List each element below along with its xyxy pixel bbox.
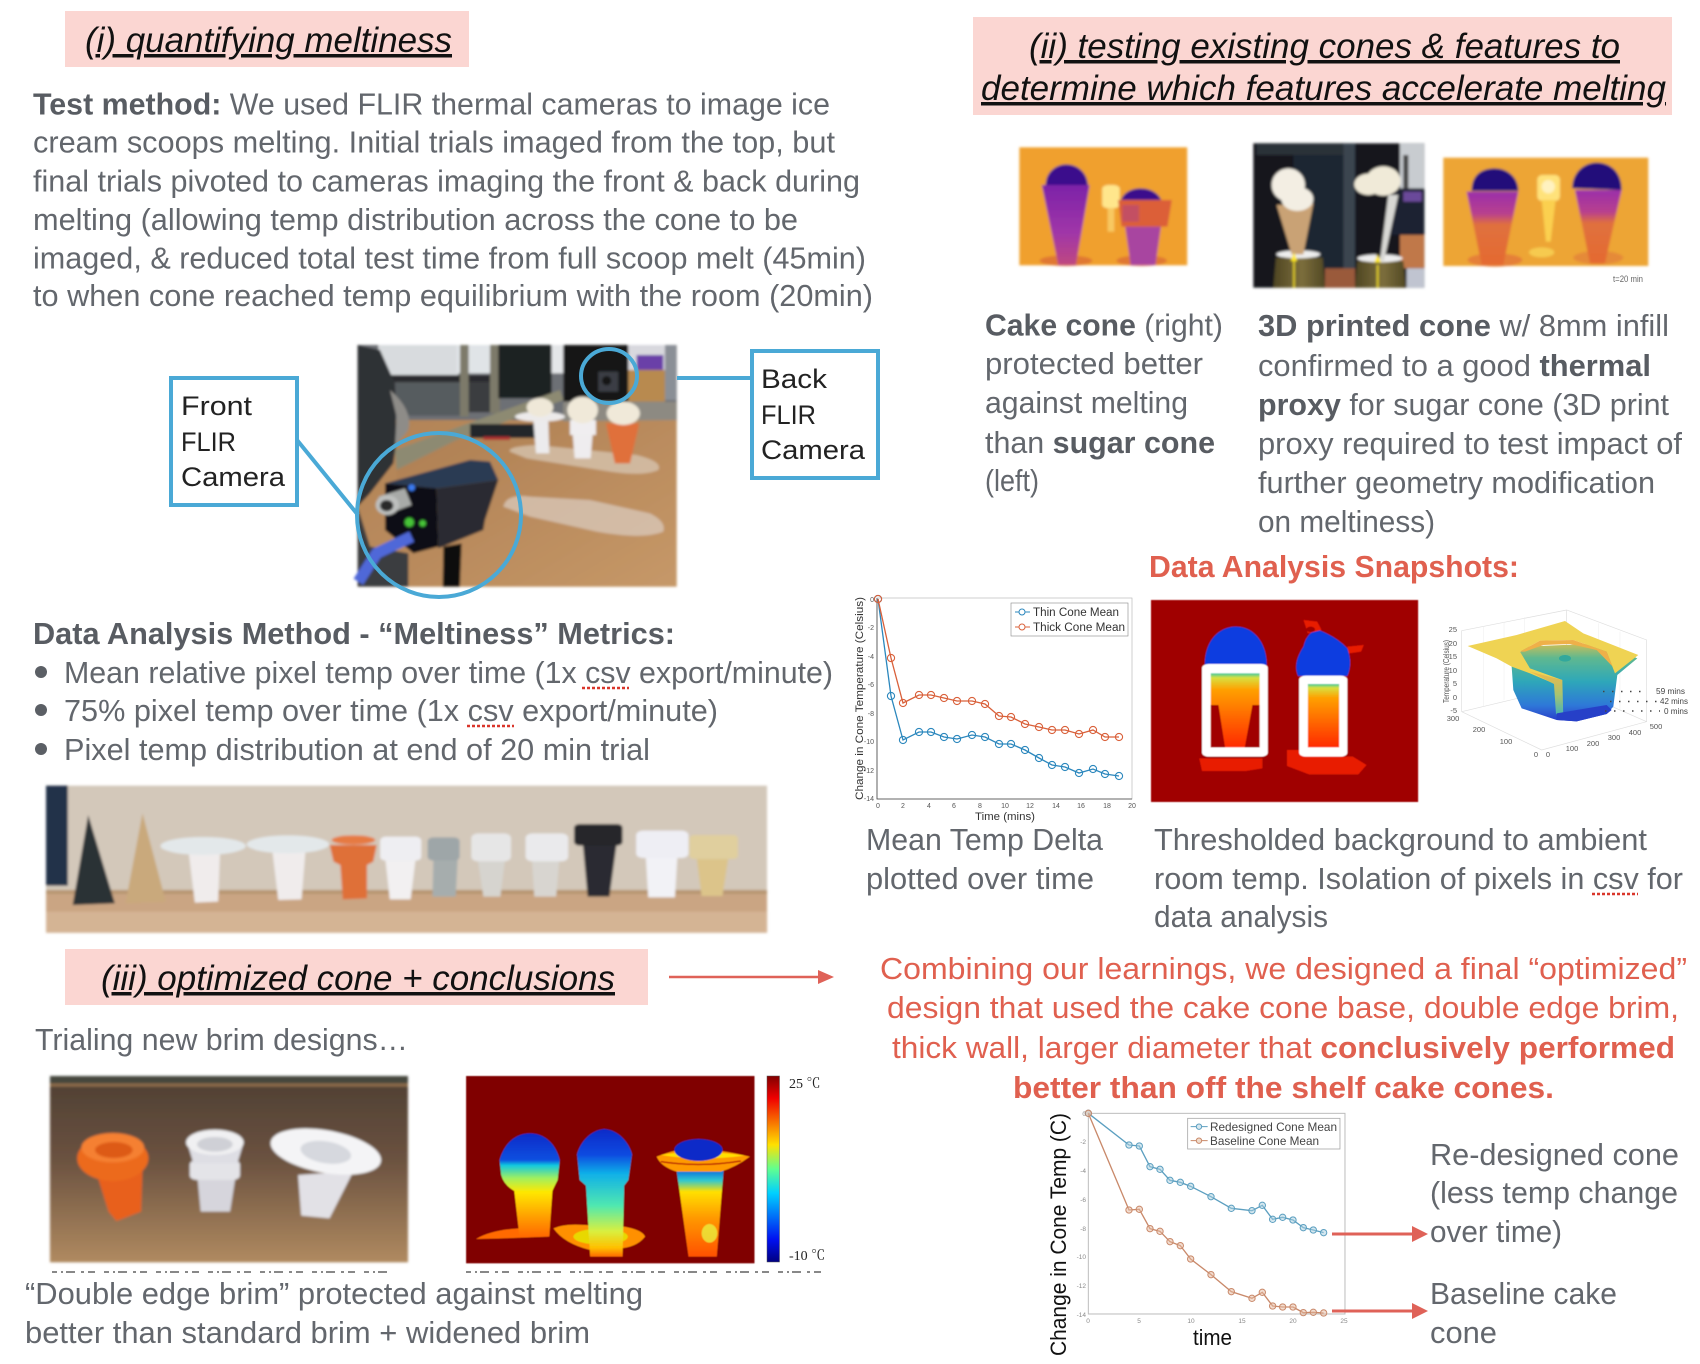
connector: back camera — [677, 376, 751, 380]
colorbar: -10 ℃ — [789, 1249, 825, 1264]
legend labels — [1210, 1120, 1337, 1148]
arrow: section iii to conclusion — [669, 970, 834, 984]
text block: test method: cream scoops melting. Initial trials imaged from the top, but — [33, 124, 835, 160]
text block: test method: to when cone reached temp equilibrium with the room (20min) — [33, 278, 873, 313]
axis title: Temperature (Celsius) — [1442, 640, 1451, 703]
label: front FLIR camera — [171, 378, 297, 505]
x ticks: 0 — [1086, 1318, 1090, 1325]
connector: front camera — [297, 440, 358, 515]
plot area — [1088, 1113, 1345, 1314]
colorbar: 25 ℃ — [789, 1077, 820, 1092]
callout: front camera circle — [357, 433, 521, 597]
axis tick labels: 400 — [1629, 728, 1641, 737]
heading: (ii) testing existing cones and features: determine which features accelerate melting — [981, 69, 1667, 108]
text: thresholded background caption — [1154, 822, 1683, 934]
y ticks: -10 — [1077, 1254, 1086, 1261]
legend: Thin Cone Mean — [1033, 607, 1119, 619]
x ticks: 10 — [1187, 1318, 1195, 1325]
y axis ticks: -2 — [868, 625, 874, 632]
axis tick labels: 10 — [1449, 666, 1457, 675]
y axis ticks: -6 — [868, 682, 874, 689]
y axis ticks: -12 — [864, 768, 874, 775]
x ticks: 25 — [1340, 1318, 1348, 1325]
text: thresholded background caption: data analysis — [1154, 899, 1328, 934]
label: back FLIR camera: FLIR — [761, 400, 816, 430]
text block: test method: Test method: We used FLIR thermal cameras to image ice — [33, 86, 830, 122]
text block: 3D printed cone: confirmed to a good thermal — [1258, 348, 1651, 383]
heading: (iii) optimized cone + conclusions: (iii) optimized cone + conclusions — [101, 959, 615, 998]
thermal image: three brim designs with colorbar — [466, 1076, 825, 1264]
callout: optimized design conclusion — [880, 952, 1687, 1105]
text: re-designed cone label: over time) — [1430, 1214, 1562, 1249]
photo: waffle cone and 3D printed cone — [1253, 143, 1424, 288]
text block: double edge brim conclusion: “Double edge brim” protected against melting — [25, 1276, 643, 1311]
y axis ticks: -14 — [864, 796, 874, 803]
axis tick labels: 0 — [1534, 750, 1538, 759]
photo: three printed brim prototypes — [50, 1076, 408, 1262]
x axis ticks: 16 — [1077, 803, 1085, 810]
legend box — [1188, 1118, 1340, 1149]
text block: 3D printed cone — [1258, 308, 1682, 539]
text: baseline cake cone label — [1430, 1276, 1617, 1350]
axis tick labels: 300 — [1447, 714, 1459, 723]
axis tick labels: 500 — [1650, 722, 1662, 731]
photo: row of test cones — [46, 786, 767, 933]
x axis ticks: 18 — [1103, 803, 1111, 810]
text: re-designed cone label: (less temp change — [1430, 1175, 1678, 1210]
legend: Thick Cone Mean — [1033, 622, 1125, 634]
callout: optimized design conclusion: Combining our learnings, we designed a final “optimized” — [880, 952, 1687, 986]
x ticks: 5 — [1137, 1318, 1141, 1325]
series: thick cone mean — [878, 599, 1119, 737]
legend — [1011, 603, 1128, 636]
series: baseline cone mean — [1088, 1113, 1324, 1313]
thermal image: thresholded background — [1151, 600, 1418, 802]
y axis ticks: -8 — [868, 711, 874, 718]
text: re-designed cone label — [1430, 1137, 1679, 1249]
text block: test method: imaged, & reduced total test time from full scoop melt (45min) — [33, 240, 866, 276]
text: mean temp delta caption: plotted over time — [866, 861, 1094, 896]
series: redesigned cone mean — [1088, 1113, 1324, 1233]
axis tick labels: 25 — [1449, 625, 1457, 634]
y ticks: -6 — [1080, 1197, 1086, 1204]
legend labels: Redesigned Cone Mean — [1210, 1120, 1337, 1134]
text block: 3D printed cone: proxy for sugar cone (3D print — [1258, 387, 1669, 422]
y ticks: -4 — [1080, 1168, 1086, 1175]
text block: double edge brim conclusion: better than standard brim + widened brim — [25, 1315, 590, 1350]
text block: test method — [33, 86, 873, 313]
x axis title: time — [1193, 1325, 1232, 1350]
legend labels: Baseline Cone Mean — [1210, 1134, 1319, 1148]
heading: data analysis snapshots: Data Analysis Snapshots: — [1149, 550, 1519, 584]
y ticks — [1077, 1111, 1086, 1319]
legend swatches — [1191, 1124, 1208, 1143]
axis tick labels: 100 — [1500, 737, 1512, 746]
text: mean temp delta caption — [866, 822, 1104, 896]
axis tick labels: 100 — [1566, 744, 1578, 753]
x axis ticks: 8 — [978, 803, 982, 810]
label: front FLIR camera: Camera — [181, 462, 286, 492]
text block: 3D printed cone: on meltiness) — [1258, 504, 1435, 539]
text block: cake cone — [985, 308, 1223, 498]
axis tick labels: 0 — [1546, 750, 1550, 759]
heading: (i) quantifying meltiness: (i) quantifying meltiness — [85, 21, 452, 60]
label: back FLIR camera: Camera — [761, 435, 866, 465]
axis tick labels — [1447, 625, 1662, 759]
heading: (i) quantifying meltiness — [65, 11, 469, 67]
y ticks: -14 — [1077, 1312, 1086, 1319]
line chart: mean temp delta thin vs thick cone — [854, 597, 1136, 823]
text block: test method: final trials pivoted to cameras imaging the front & back during — [33, 164, 860, 198]
axis tick labels: 300 — [1608, 733, 1620, 742]
arrow: to baseline cone label — [1332, 1303, 1428, 1319]
text block: cake cone: protected better — [985, 346, 1203, 381]
photo: cameras and cones on bench — [358, 345, 677, 587]
thermal image: waffle vs printed proxy — [1443, 158, 1648, 284]
x ticks: 20 — [1289, 1318, 1297, 1325]
text: mean temp delta caption: Mean Temp Delta — [866, 822, 1104, 857]
x axis ticks — [876, 803, 1136, 810]
y ticks: -2 — [1080, 1139, 1086, 1146]
text block: double edge brim conclusion — [25, 1276, 643, 1350]
callout: optimized design conclusion: design that used the cake cone base, double edge brim, — [887, 991, 1679, 1025]
figure: FLIR camera test setup — [171, 345, 878, 597]
colorbar — [767, 1076, 825, 1264]
label: front FLIR camera: Front — [181, 391, 253, 421]
callout: optimized design conclusion: thick wall, larger diameter that conclusively performed — [892, 1031, 1675, 1065]
text: thresholded background caption: room temp. Isolation of pixels in csv for — [1154, 861, 1683, 896]
axis tick labels: 5 — [1453, 679, 1457, 688]
label: back FLIR camera: Back — [761, 364, 828, 394]
time level labels: 0 mins — [1664, 706, 1688, 716]
timestamp label: t=20 min — [1613, 274, 1643, 284]
x ticks: 15 — [1238, 1318, 1246, 1325]
clipped figure caption remnants — [52, 1271, 826, 1273]
text block: 3D printed cone: further geometry modification — [1258, 465, 1655, 500]
axis tick labels: 200 — [1473, 725, 1485, 734]
heading: (ii) testing existing cones and features — [973, 17, 1672, 115]
callout: optimized design conclusion: better than off the shelf cake cones. — [1013, 1071, 1554, 1105]
text block: data analysis method metrics: Mean relative pixel temp over time (1x csv export/minute) — [64, 655, 833, 690]
series: thin cone mean — [878, 599, 1119, 776]
text block: data analysis method metrics: Data Analysis Method - “Meltiness” Metrics: — [33, 616, 675, 651]
x axis ticks: 12 — [1026, 803, 1034, 810]
text block: 3D printed cone: 3D printed cone w/ 8mm infill — [1258, 308, 1669, 343]
y axis ticks: -4 — [868, 654, 874, 661]
text block: cake cone: (left) — [985, 463, 1039, 498]
time level labels — [1603, 686, 1688, 716]
text: trialing new brim designs: Trialing new brim designs… — [35, 1022, 408, 1057]
y axis title: Change in Cone Temperature (Celsius) — [854, 597, 866, 800]
text: baseline cake cone label: cone — [1430, 1315, 1497, 1350]
label: front FLIR camera: FLIR — [181, 427, 236, 457]
y axis ticks: 0 — [870, 597, 874, 604]
text block: data analysis method metrics: 75% pixel temp over time (1x csv export/minute) — [64, 693, 718, 728]
callout: back camera circle — [581, 349, 637, 403]
text: baseline cake cone label: Baseline cake — [1430, 1276, 1617, 1311]
y ticks: -8 — [1080, 1226, 1086, 1233]
x axis ticks: 20 — [1128, 803, 1136, 810]
line chart: redesigned vs baseline cone — [1046, 1111, 1348, 1356]
text: thresholded background caption: Thresholded background to ambient — [1154, 822, 1647, 857]
heading: (ii) testing existing cones and features: (ii) testing existing cones & features to — [1029, 27, 1620, 66]
axis tick labels: 20 — [1449, 639, 1457, 648]
y axis ticks: -10 — [864, 739, 874, 746]
x axis ticks: 0 — [876, 803, 880, 810]
x ticks — [1086, 1318, 1348, 1325]
text block: test method: melting (allowing temp distribution across the cone to be — [33, 202, 798, 237]
time level labels: 59 mins — [1656, 686, 1685, 696]
text: re-designed cone label: Re-designed cone — [1430, 1137, 1679, 1172]
x axis ticks: 14 — [1052, 803, 1060, 810]
axis tick labels: 200 — [1587, 739, 1599, 748]
text block: cake cone: than sugar cone — [985, 425, 1215, 460]
thermal image: sugar cone and cake cone — [1019, 147, 1187, 266]
x axis ticks: 2 — [901, 803, 905, 810]
time level labels: 42 mins — [1660, 696, 1688, 706]
arrow: to redesigned cone label — [1332, 1226, 1428, 1242]
y axis title: Change in Cone Temp (C) — [1046, 1113, 1071, 1356]
label: back FLIR camera — [752, 351, 878, 478]
x axis ticks: 10 — [1001, 803, 1009, 810]
text block: cake cone: against melting — [985, 385, 1188, 420]
y ticks: -12 — [1077, 1283, 1086, 1290]
x axis ticks: 4 — [927, 803, 931, 810]
3D surface plot: pixel temperature — [1442, 610, 1688, 759]
text block: data analysis method metrics — [33, 616, 833, 767]
axis tick labels: 0 — [1453, 693, 1457, 702]
text block: data analysis method metrics: Pixel temp distribution at end of 20 min trial — [64, 732, 650, 767]
x axis ticks: 6 — [952, 803, 956, 810]
axis tick labels: 15 — [1449, 652, 1457, 661]
x axis title: Time (mins) — [975, 811, 1035, 823]
text block: 3D printed cone: proxy required to test impact of — [1258, 426, 1682, 461]
y axis ticks — [864, 597, 874, 803]
y ticks: 0 — [1082, 1111, 1086, 1118]
text block: cake cone: Cake cone (right) — [985, 308, 1223, 342]
heading: (iii) optimized cone + conclusions — [65, 949, 648, 1005]
axis tick labels: -5 — [1450, 706, 1457, 715]
